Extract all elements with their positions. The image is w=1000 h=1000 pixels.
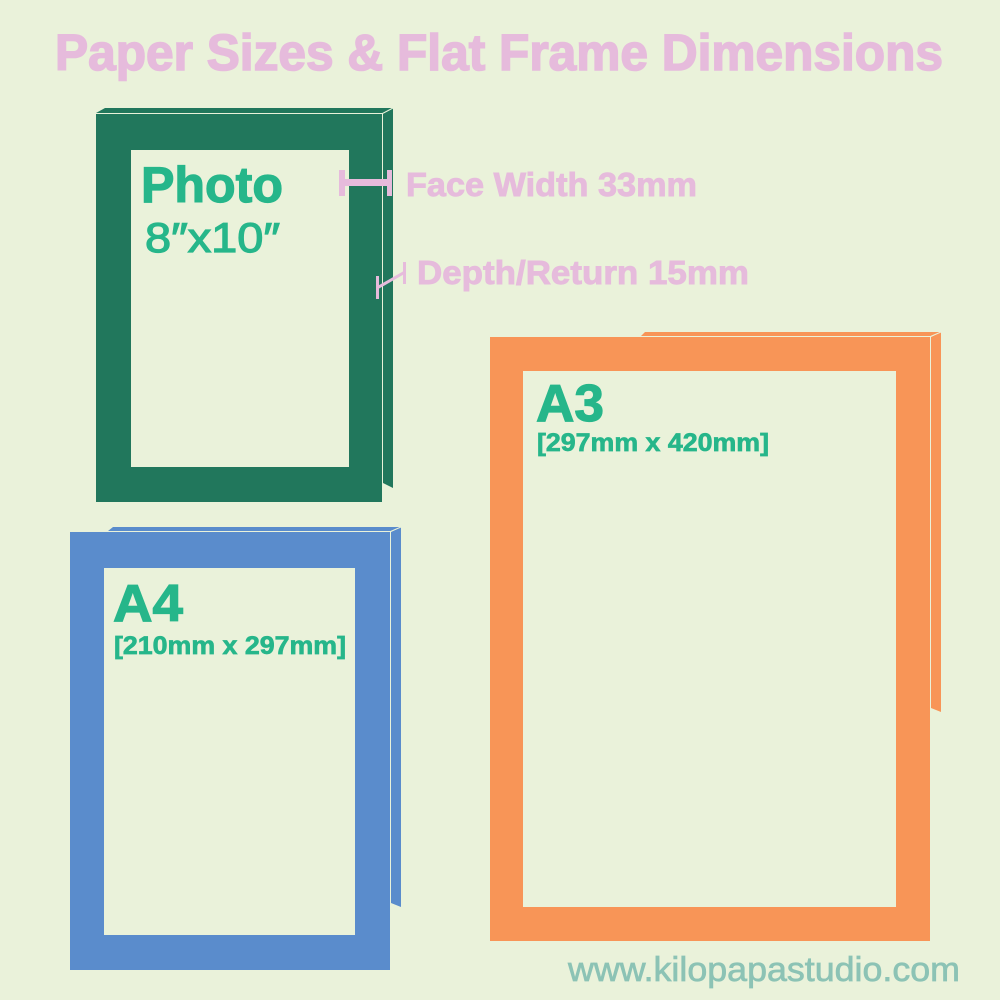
title: Paper Sizes & Flat Frame Dimensions <box>55 24 943 81</box>
a4 label: A4 <box>113 575 183 633</box>
photo frame <box>96 108 393 502</box>
a3 label: A3 <box>536 375 604 433</box>
depth label: Depth/Return 15mm <box>417 254 749 291</box>
a3 size: [297mm x 420mm] <box>537 429 769 457</box>
a4 frame <box>70 527 401 970</box>
face width label: Face Width 33mm <box>406 166 697 203</box>
a4 size: [210mm x 297mm] <box>114 632 346 660</box>
website url: www.kilopapastudio.com <box>567 951 960 989</box>
face width marker <box>339 170 392 196</box>
a3 frame <box>490 332 941 941</box>
photo size: 8″x10″ <box>145 214 280 261</box>
photo label: Photo <box>141 157 283 213</box>
depth marker <box>377 262 405 299</box>
